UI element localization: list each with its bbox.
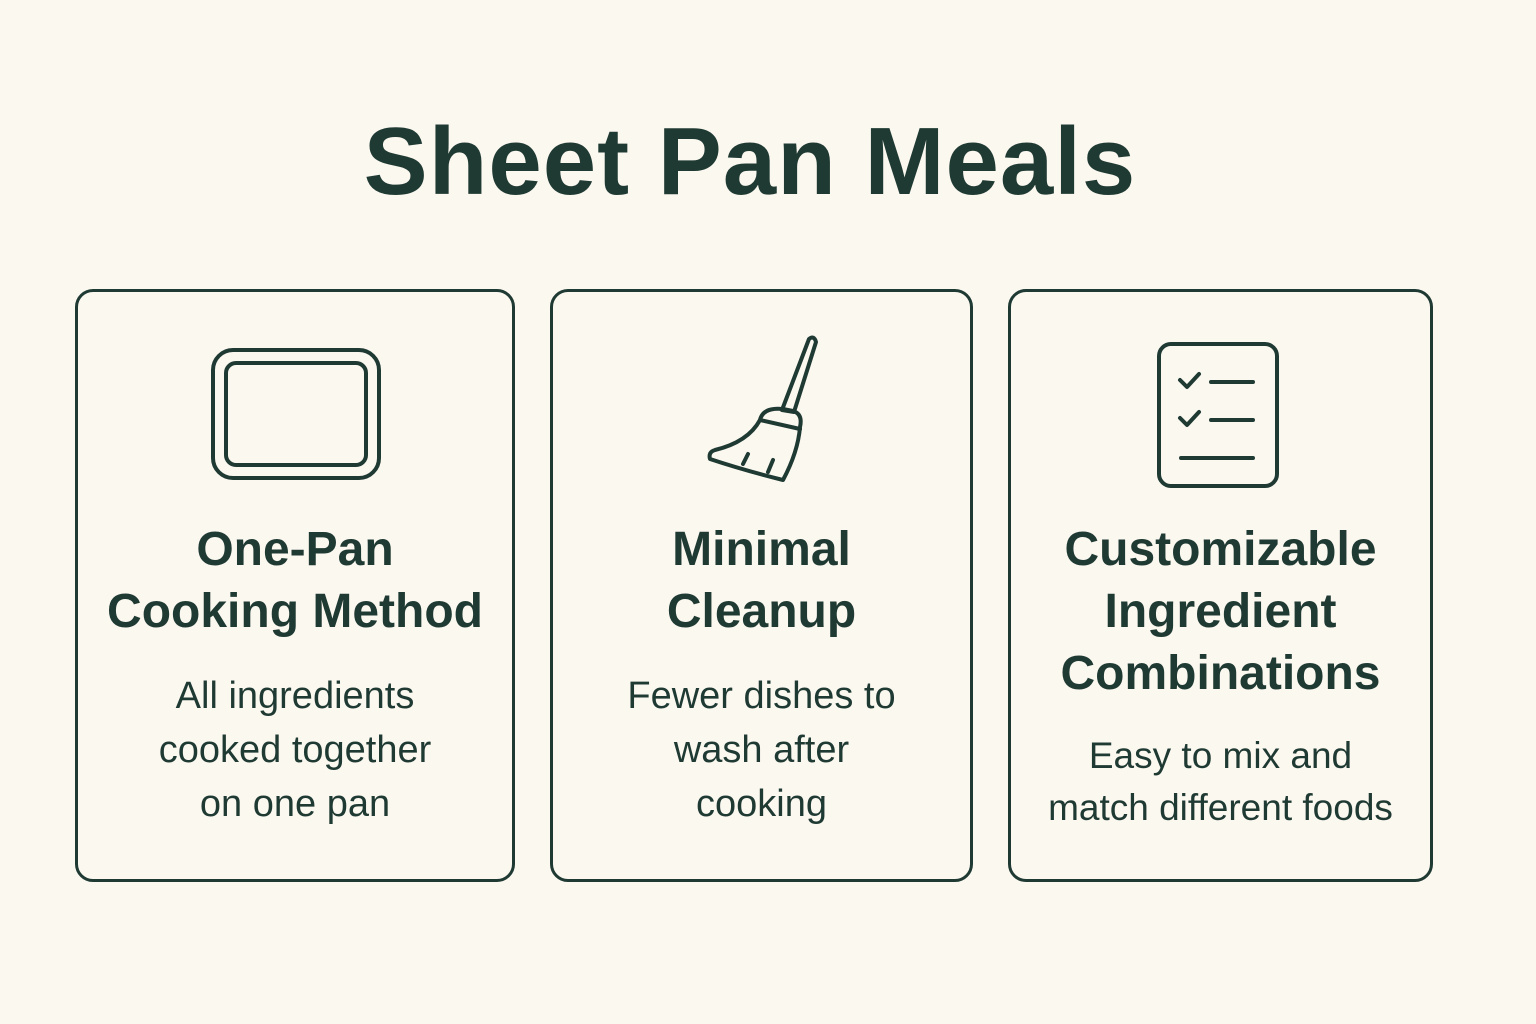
heading: Cooking Method xyxy=(107,585,483,638)
body xyxy=(159,675,431,825)
body: Easy to mix and xyxy=(1089,735,1352,776)
body: on one pan xyxy=(200,783,390,825)
body xyxy=(627,675,896,825)
body xyxy=(1048,735,1393,828)
heading: Cleanup xyxy=(667,585,856,638)
body: cooked together xyxy=(159,729,431,771)
body: cooking xyxy=(696,783,827,825)
heading xyxy=(107,523,483,638)
panel: one-pan xyxy=(75,289,515,882)
panel: cleanup xyxy=(550,289,973,882)
heading: Combinations xyxy=(1060,647,1380,700)
heading xyxy=(1060,523,1380,700)
panel: customizable xyxy=(1008,289,1433,882)
heading: One-Pan xyxy=(196,523,394,576)
icon: sheet pan xyxy=(211,348,381,480)
body: wash after xyxy=(674,729,849,771)
body: All ingredients xyxy=(176,675,414,717)
heading: Ingredient xyxy=(1104,585,1336,638)
title: Sheet Pan Meals xyxy=(364,108,1136,215)
body: Fewer dishes to xyxy=(627,675,896,717)
heading: Customizable xyxy=(1064,523,1377,576)
icon: broom xyxy=(708,336,818,482)
heading xyxy=(667,523,856,638)
icon: checklist xyxy=(1157,342,1279,488)
body: match different foods xyxy=(1048,787,1393,828)
heading: Minimal xyxy=(672,523,851,576)
